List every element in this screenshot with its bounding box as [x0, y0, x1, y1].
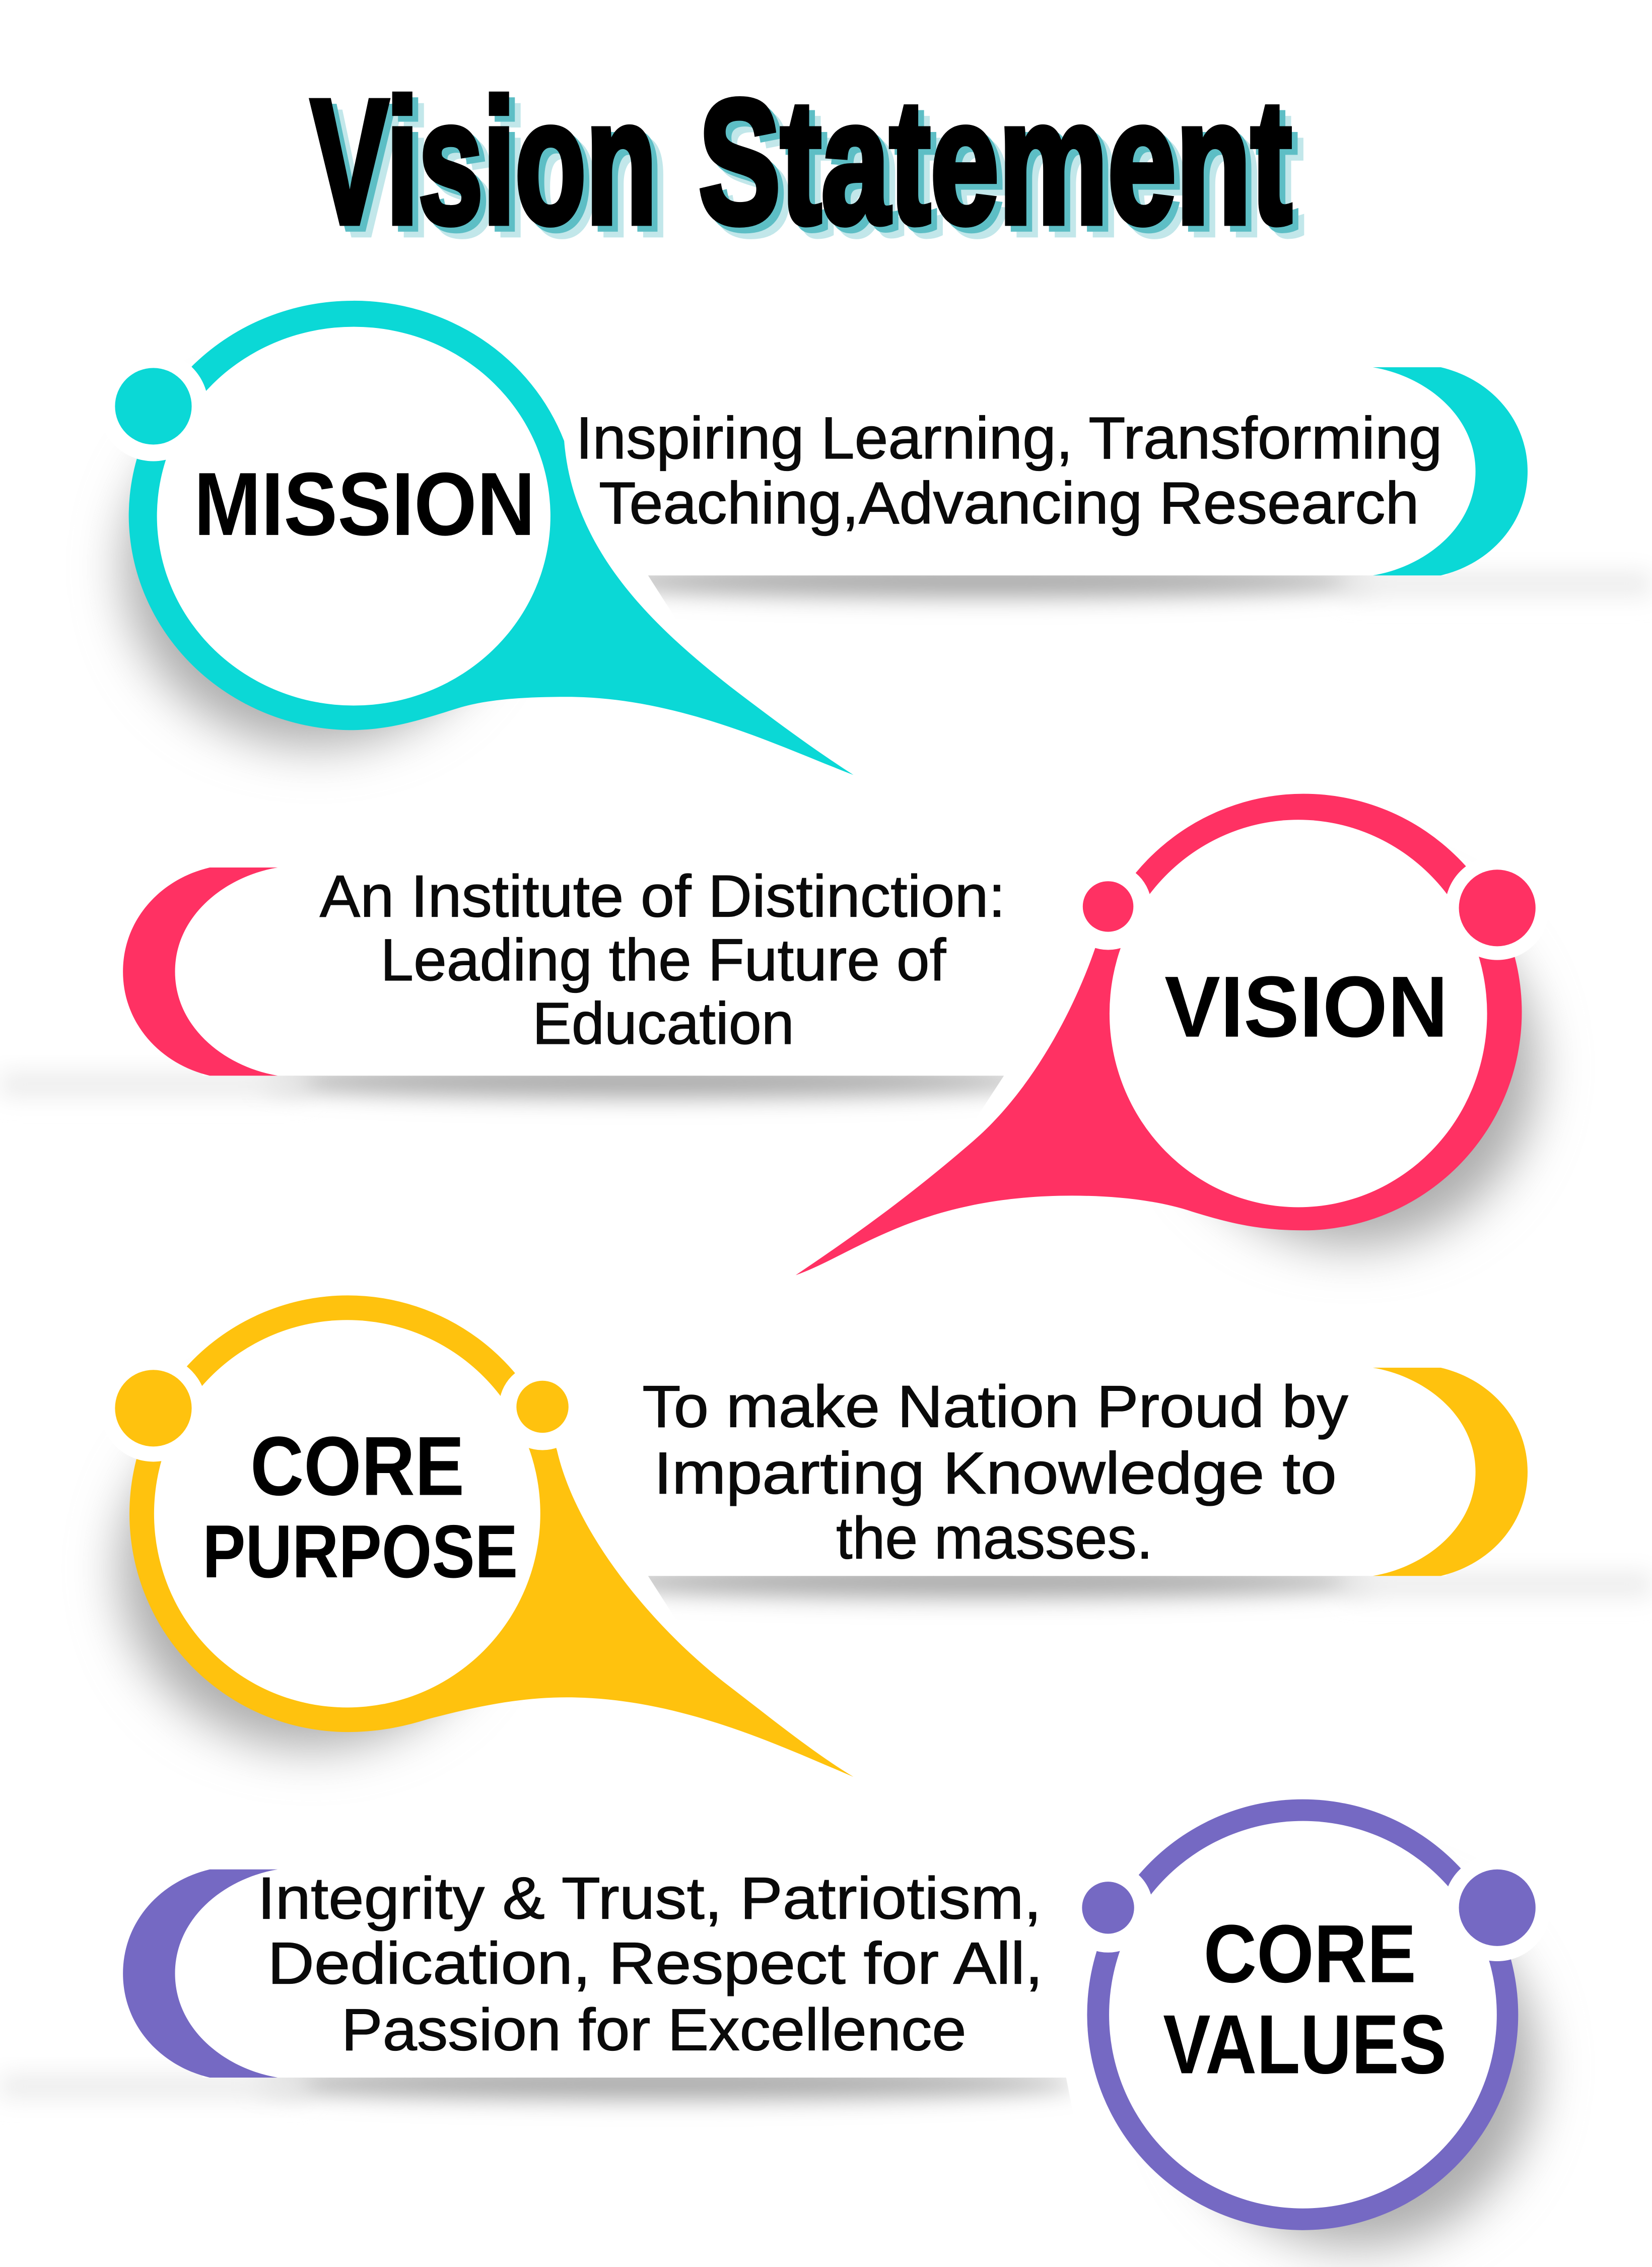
text: core values statement: Integrity & Trust, Patriotism,	[257, 1864, 1042, 1931]
banner shadow: core values	[0, 2068, 1078, 2099]
text: core purpose statement: Imparting Knowledge to	[654, 1440, 1337, 1506]
label: core values: VALUES	[1163, 1997, 1447, 2091]
text: core values statement: Passion for Excellence	[341, 1996, 967, 2063]
badge ring: core values	[1063, 1799, 1551, 2230]
crescent: core purpose	[1373, 1368, 1528, 1576]
banner shadow: vision	[0, 1065, 1042, 1097]
label: vision: VISION	[1164, 958, 1448, 1055]
bubble shadow: mission	[124, 387, 506, 746]
text: mission statement: Teaching,Advancing Research	[599, 470, 1419, 536]
banner shadow: core purpose	[593, 1566, 1652, 1597]
text: mission statement: Inspiring Learning, Transforming	[576, 405, 1442, 471]
crescent: vision	[123, 868, 278, 1076]
bubble shadow: core values	[1178, 1888, 1536, 2247]
label: mission: MISSION	[194, 454, 535, 554]
text: core values statement	[257, 1864, 1043, 2063]
panel: vision	[0, 794, 1549, 1275]
title	[311, 63, 1292, 260]
panel: core values	[0, 1799, 1551, 2247]
banner shadow: mission	[593, 565, 1652, 597]
label: core purpose: CORE	[250, 1420, 464, 1513]
speech bubble: mission	[98, 301, 854, 775]
crescent: core values	[123, 1870, 278, 2078]
label: core purpose	[202, 1420, 518, 1593]
text: mission statement	[576, 405, 1442, 536]
panel: mission	[98, 301, 1652, 775]
bubble shadow: core purpose	[120, 1389, 502, 1748]
speech bubble: vision	[796, 794, 1549, 1275]
title: Vision	[311, 63, 657, 260]
bubble shadow: vision	[1169, 888, 1536, 1246]
text: vision statement: Education	[532, 990, 794, 1056]
label: core purpose: PURPOSE	[202, 1509, 518, 1593]
label: core values: CORE	[1204, 1908, 1416, 2000]
text: core purpose statement	[642, 1373, 1348, 1571]
label: core values	[1163, 1908, 1447, 2091]
text: core purpose statement: the masses.	[836, 1505, 1153, 1571]
text: vision statement	[320, 863, 1005, 1056]
title: Statement	[699, 63, 1292, 260]
panel: core purpose	[100, 1295, 1652, 1777]
text: vision statement: An Institute of Distinction:	[320, 863, 1005, 929]
text: core values statement: Dedication, Respect for All,	[267, 1930, 1043, 1996]
crescent: mission	[1373, 367, 1528, 575]
speech bubble: core purpose	[100, 1295, 854, 1777]
text: vision statement: Leading the Future of	[380, 926, 946, 993]
text: core purpose statement: To make Nation Proud by	[642, 1373, 1348, 1440]
